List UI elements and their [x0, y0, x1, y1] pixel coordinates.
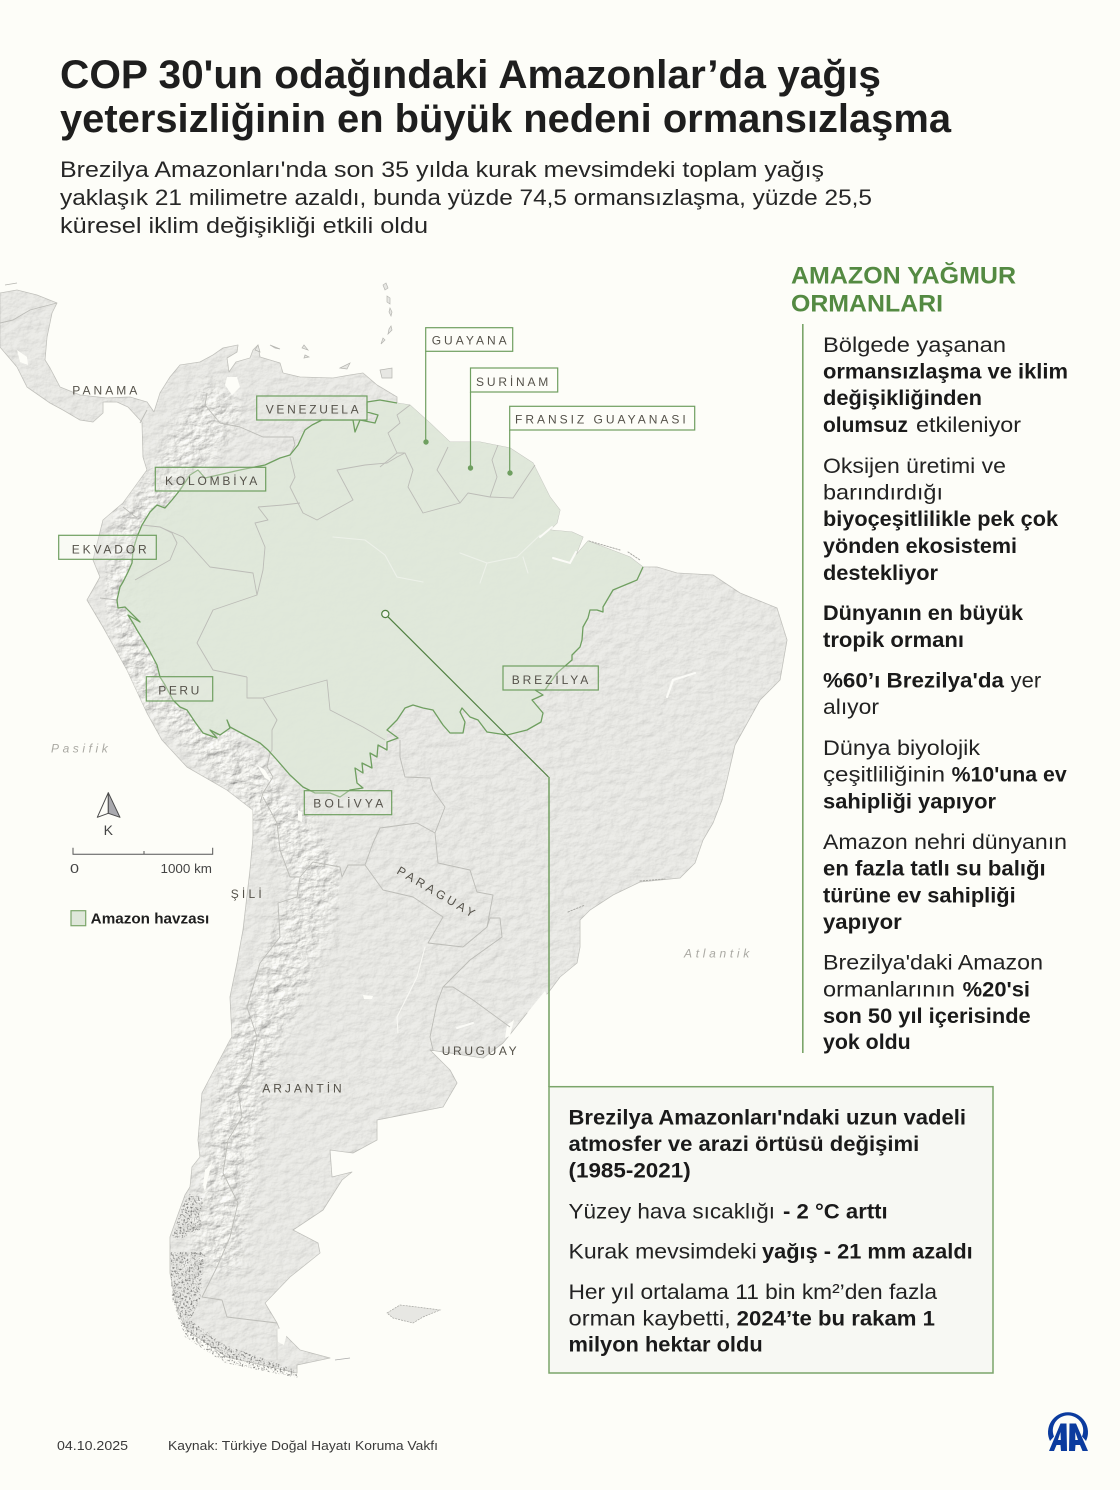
fact 1: olumsuz: [823, 414, 908, 437]
fact 6: [823, 831, 1067, 934]
scale bar: [70, 848, 213, 876]
temperature statistic: - 2 °C arttı: [783, 1200, 888, 1223]
label: Peru: PERU: [158, 683, 199, 697]
rainfall statistic: Kurak mevsimdeki: [568, 1240, 757, 1263]
subtitle: küresel iklim değişikliği etkili oldu: [60, 213, 428, 238]
label: Kolombiya: KOLOMBİYA: [165, 474, 257, 488]
subtitle: yaklaşık 21 milimetre azaldı, bunda yüzde 74,5 ormansızlaşma, yüzde 25,5: [60, 185, 872, 210]
fact 6: türüne ev sahipliği: [823, 884, 1016, 907]
side panel rule: [802, 324, 804, 1053]
fact 1: [823, 334, 1068, 437]
rainfall statistic: [568, 1240, 973, 1263]
country borders: [0, 303, 535, 1360]
ocean label: Atlantik: Atlantik: [683, 946, 750, 960]
label with leader: Fransiz Guayanasi: [507, 406, 695, 476]
panel heading: Brezilya Amazonları'ndaki uzun vadeli: [568, 1106, 966, 1129]
north arrow: [97, 793, 120, 838]
fact 5: çeşitliliğinin: [823, 764, 945, 787]
fact 4: %60’ı Brezilya'da: [823, 669, 1004, 692]
label: Bolivya: [304, 791, 392, 815]
label: Brezilya: BREZİLYA: [512, 673, 588, 687]
label: Ekvador: EKVADOR: [72, 542, 147, 556]
label with leader: Guayana: [423, 328, 513, 445]
fact 7: yok oldu: [823, 1031, 911, 1054]
icon: Anadolu Agency logo: [1048, 1412, 1088, 1451]
islands and fjord coast: [5, 283, 440, 1360]
legend: Amazon basin: Amazon havzası: [91, 910, 209, 927]
fact 2: barındırdığı: [823, 482, 943, 504]
map label: Sili: ŞİLİ: [231, 887, 262, 901]
map label: Paraguay: PARAGUAY: [394, 864, 477, 920]
lakes and salt flats: [17, 350, 548, 1345]
side panel heading: ORMANLARI: [791, 290, 943, 318]
scale bar: 0: [70, 861, 79, 876]
label: Ekvador: [59, 535, 156, 559]
label: Bolivya: BOLİVYA: [313, 796, 383, 810]
footer: source: Kaynak: Türkiye Doğal Hayatı Koruma Vakfı: [168, 1438, 438, 1453]
fact 3: tropik ormanı: [823, 629, 964, 652]
label with leader: Surinam: SURİNAM: [476, 375, 548, 389]
side panel heading: AMAZON YAĞMUR: [791, 262, 1016, 290]
fact 4: [823, 669, 1041, 719]
temperature statistic: Yüzey hava sıcaklığı: [568, 1200, 775, 1223]
title: COP 30'un odağındaki Amazonlar’da yağış: [60, 53, 881, 97]
fact 6: en fazla tatlı su balığı: [823, 858, 1046, 881]
footer: date: 04.10.2025: [57, 1438, 128, 1453]
forest loss statistic: milyon hektar oldu: [568, 1334, 763, 1357]
fact 4: yer: [1011, 669, 1041, 692]
fact 3: [823, 602, 1023, 652]
title: [60, 53, 952, 141]
map of South America: [0, 280, 800, 1380]
rainfall statistic: yağış - 21 mm azaldı: [762, 1240, 973, 1263]
label with leader: Fransiz Guayanasi: FRANSIZ GUAYANASI: [515, 413, 686, 427]
Amazon basin boundary line: [117, 400, 643, 797]
north arrow: K: [104, 822, 114, 838]
fact 2: biyoçeşitlilikle pek çok: [823, 508, 1058, 531]
fact 7: ormanlarının: [823, 979, 955, 1002]
scale bar: 1000 km: [160, 861, 212, 876]
fact 7: son 50 yıl içerisinde: [823, 1005, 1031, 1028]
fact 5: sahipliği yapıyor: [823, 790, 996, 814]
fact 7: %20'si: [963, 979, 1030, 1002]
fact 5: Dünya biyolojik: [823, 737, 981, 760]
panel heading: atmosfer ve arazi örtüsü değişimi: [568, 1133, 919, 1156]
subtitle: [60, 157, 872, 238]
fact 4: alıyor: [823, 696, 879, 719]
fact 1: etkileniyor: [916, 414, 1021, 437]
label: Peru: [146, 677, 213, 701]
fact 2: [823, 455, 1058, 585]
fact 2: destekliyor: [823, 562, 938, 585]
Amazon basin area: [117, 400, 643, 797]
map label: Uruguay: URUGUAY: [442, 1044, 517, 1058]
label with leader: Surinam: [468, 368, 558, 471]
label with leader: Guayana: GUAYANA: [432, 334, 507, 348]
forest loss statistic: orman kaybetti,: [568, 1308, 731, 1331]
connector line from map marker to info box: [382, 610, 549, 1087]
fact 5: [823, 737, 1067, 814]
forest loss statistic: Her yıl ortalama 11 bin km²’den fazla: [568, 1281, 937, 1304]
fact 7: [823, 952, 1043, 1054]
side panel heading: [791, 262, 1016, 318]
label: Venezuela: VENEZUELA: [266, 402, 359, 416]
panel heading: [568, 1106, 966, 1183]
temperature statistic: [568, 1200, 888, 1223]
rivers inside the basin: [333, 527, 576, 583]
fact 1: Bölgede yaşanan: [823, 334, 1006, 357]
label: Brezilya: [503, 666, 598, 690]
subtitle: Brezilya Amazonları'nda son 35 yılda kurak mevsimdeki toplam yağış: [60, 157, 824, 182]
forest loss statistic: [568, 1281, 937, 1357]
title: yetersizliğinin en büyük nedeni ormansızlaşma: [60, 97, 952, 141]
label: Venezuela: [257, 396, 367, 420]
fact 5: %10'una ev: [952, 764, 1067, 787]
panel heading: (1985-2021): [568, 1160, 691, 1183]
land mass: [0, 280, 800, 1380]
fact 2: yönden ekosistemi: [823, 535, 1017, 558]
fact 1: ormansızlaşma ve iklim: [823, 360, 1068, 384]
panel: long-term change in Brazilian Amazon: [549, 1087, 993, 1373]
map label: Arjantin: ARJANTİN: [262, 1082, 342, 1096]
forest loss statistic: 2024’te bu rakam 1: [737, 1308, 935, 1331]
map label: Panama: PANAMA: [72, 384, 137, 398]
fact 6: yapıyor: [823, 911, 902, 934]
label: Kolombiya: [155, 467, 266, 491]
ocean label: Pasifik: Pasifik: [51, 742, 109, 756]
fact 2: Oksijen üretimi ve: [823, 455, 1006, 478]
fact 3: Dünyanın en büyük: [823, 602, 1023, 625]
side panel: Amazon rainforest facts: [791, 262, 1068, 1054]
fact 6: Amazon nehri dünyanın: [823, 831, 1067, 854]
fact 7: Brezilya'daki Amazon: [823, 952, 1043, 975]
fact 1: değişikliğinden: [823, 387, 982, 410]
